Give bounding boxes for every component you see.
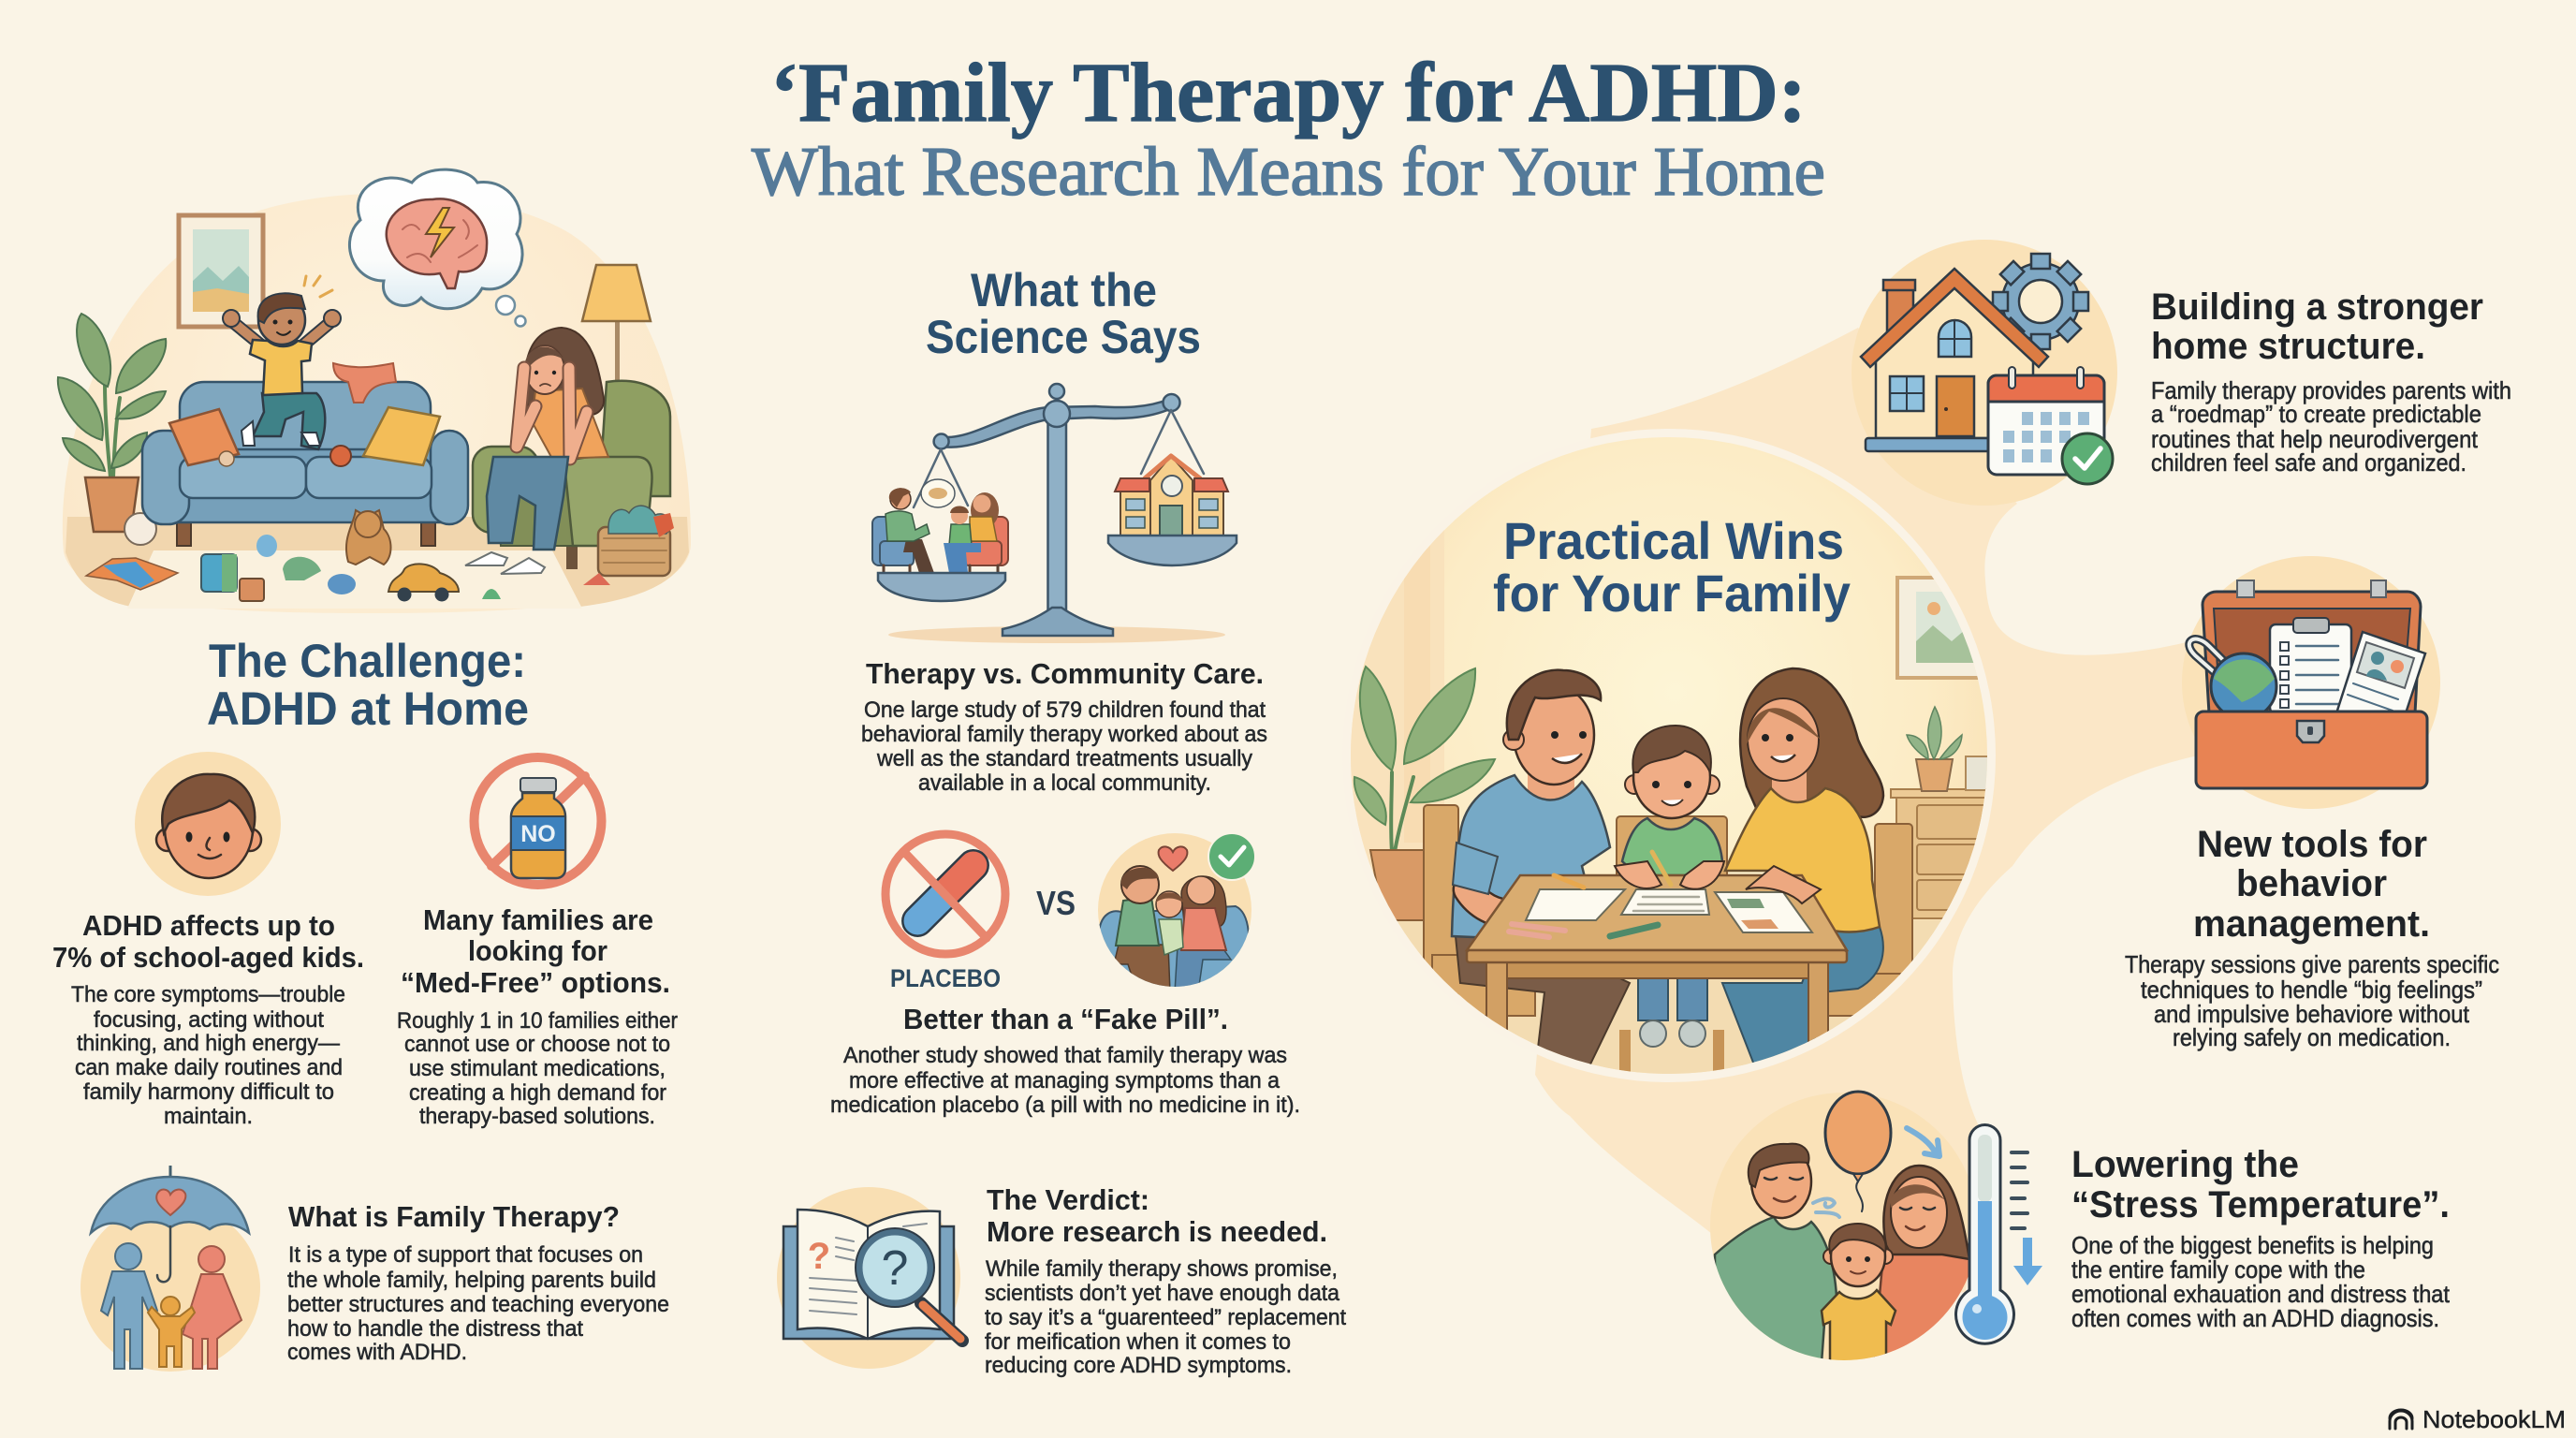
text: Med-Free options: “Med-Free” options. (401, 966, 670, 999)
text: Therapy vs Community Care: well as the standard treatments usually (876, 746, 1253, 771)
text: Therapy vs Community Care: behavioral family therapy worked about as (861, 722, 1267, 747)
text: New tools for behavior management: and impulsive behaviore without (2154, 1000, 2470, 1028)
text: The Verdict (985, 1183, 1346, 1378)
text: What is Family Therapy: What is Family Therapy? (288, 1200, 620, 1233)
icon: balance scale (872, 384, 1237, 643)
icon: child face (135, 752, 281, 896)
text: Building a stronger home structure: Building a stronger (2151, 286, 2483, 328)
text: ADHD affects (52, 909, 364, 1129)
text: Med-Free options (397, 903, 678, 1129)
text: Lowering the Stress Temperature (2071, 1144, 2451, 1332)
title: What Research Means for Your Home (752, 134, 1825, 211)
title (752, 47, 1825, 211)
label: VS: VS (1036, 884, 1076, 922)
heading: What the Science Says (926, 264, 1201, 363)
mother (1722, 668, 1883, 1067)
text: The Verdict: for meification when it comes to (985, 1329, 1291, 1355)
icon: open book and magnifier: ? (882, 1241, 908, 1296)
text: New tools for behavior management: Therapy sessions give parents specific (2125, 950, 2499, 978)
text: What is Family Therapy: the whole family, helping parents build (287, 1268, 656, 1293)
icon: crossed-out placebo pill: PLACEBO (890, 964, 1001, 992)
text: Lowering the Stress Temperature: “Stress Temperature”. (2071, 1184, 2450, 1225)
text: The Verdict: While family therapy shows promise, (986, 1256, 1338, 1282)
text: Lowering the Stress Temperature: emotional exhauation and distress that (2071, 1280, 2451, 1308)
text: Building a stronger home structure: routines that help neurodivergent (2151, 425, 2479, 453)
text: The Verdict: The Verdict: (987, 1183, 1149, 1216)
papers and pencils (1509, 852, 1821, 937)
text: ADHD affects: The core symptoms—trouble (71, 982, 345, 1007)
text: New tools for behavior management: behavior (2236, 863, 2387, 904)
panel: practical wins circle (1342, 429, 1996, 1082)
text: The Verdict: reducing core ADHD symptoms. (985, 1353, 1292, 1378)
heading: Practical Wins (1493, 511, 1851, 623)
text: ADHD affects: maintain. (164, 1104, 253, 1129)
text: Med-Free options: use stimulant medications, (409, 1056, 666, 1081)
text: What is Family Therapy (287, 1200, 669, 1365)
heading: The Challenge (207, 635, 529, 735)
jumping boy (223, 276, 341, 449)
text: New tools for behavior management: techniques to hendle “big feelings” (2141, 976, 2482, 1004)
text: Lowering the Stress Temperature: often comes with an ADHD diagnosis. (2071, 1304, 2439, 1332)
text: ADHD affects: family harmony difficult to (83, 1079, 334, 1105)
text: ADHD affects: focusing, acting without (94, 1007, 324, 1033)
text: ADHD affects: 7% of school-aged kids. (52, 941, 364, 974)
title: ‘Family Therapy for ADHD: (770, 47, 1807, 139)
heading: What the Science Says: Science Says (926, 311, 1201, 363)
icon: family under umbrella (80, 1166, 260, 1372)
icon: open book and magnifier: ? (808, 1236, 830, 1277)
text: Med-Free options: therapy-based solutions. (419, 1104, 655, 1129)
text: Med-Free options: looking for (468, 934, 607, 967)
text: Med-Free options: cannot use or choose not to (404, 1032, 670, 1057)
icon: no medication: NO (520, 821, 556, 847)
heading: Practical Wins: for Your Family (1493, 564, 1851, 623)
text: Building a stronger home structure: a “roedmap” to create predictable (2151, 400, 2481, 428)
text: New tools for behavior management (2125, 824, 2499, 1051)
text: New tools for behavior management: management. (2193, 903, 2430, 945)
icon: crossed-out placebo pill (886, 834, 1005, 992)
icon: open book and magnifier (777, 1187, 962, 1369)
heading: Practical Wins: Practical Wins (1503, 511, 1844, 570)
heading: The Challenge: The Challenge: (209, 635, 526, 687)
text: Lowering the Stress Temperature: One of the biggest benefits is helping (2071, 1231, 2434, 1259)
potted plant (58, 314, 166, 545)
text: ADHD affects: thinking, and high energy— (77, 1031, 340, 1056)
thermometer (1956, 1125, 2042, 1343)
text: Better than a Fake Pill (830, 1003, 1300, 1118)
text: The Verdict: More research is needed. (987, 1215, 1327, 1248)
clipboard (2270, 618, 2351, 713)
child (1622, 726, 1722, 1047)
text: ADHD affects: can make daily routines and (75, 1055, 343, 1080)
text: Building a stronger home structure: children feel safe and organized. (2151, 448, 2466, 477)
text: What is Family Therapy: how to handle the distress that (287, 1316, 583, 1342)
wall picture (179, 215, 263, 327)
icon: calm family with balloon and thermometer (1710, 1092, 2042, 1376)
icon: happy family on sofa (1095, 833, 1255, 992)
text: ADHD affects: ADHD affects up to (82, 909, 335, 942)
flowing peach connector (1535, 328, 2247, 1311)
text: The Verdict: to say it’s a “guarenteed” replacement (985, 1305, 1346, 1330)
icon: house, gear and calendar (1852, 240, 2117, 506)
text: Med-Free options: Many families are (423, 903, 653, 936)
calendar (1988, 367, 2113, 484)
icon: toolbox (2182, 556, 2440, 809)
chairs (1424, 805, 1912, 1020)
floor lamp (582, 265, 651, 387)
text: Lowering the Stress Temperature: Lowering the (2071, 1144, 2299, 1185)
wall picture (1897, 578, 1982, 678)
stressed mother in armchair (465, 328, 674, 576)
heading: What the Science Says: What the (971, 264, 1157, 316)
text: Therapy vs Community Care: available in a local community. (918, 770, 1211, 796)
text: Lowering the Stress Temperature: the entire family cope with the (2071, 1255, 2365, 1284)
logo: NotebookLM: NotebookLM (2422, 1405, 2566, 1433)
left pan: therapy session (872, 479, 1008, 601)
text: Med-Free options: creating a high demand for (409, 1080, 666, 1106)
text: Therapy vs Community Care (861, 657, 1267, 796)
text: Building a stronger home structure (2151, 286, 2511, 477)
text: Better than a Fake Pill: Better than a “Fake Pill”. (903, 1003, 1228, 1035)
table (1467, 875, 1847, 1078)
balloon (1813, 1092, 1939, 1217)
large plant (1354, 667, 1495, 920)
text: Building a stronger home structure: Family therapy provides parents with (2151, 376, 2511, 404)
text: Therapy vs Community Care: Therapy vs. Community Care. (866, 657, 1264, 690)
text: Better than a Fake Pill: Another study showed that family therapy was (843, 1043, 1287, 1068)
text: What is Family Therapy: better structures and teaching everyone (287, 1292, 669, 1317)
father (1452, 670, 1630, 1072)
card (2336, 632, 2425, 713)
dresser with small plant (1891, 707, 1994, 918)
text: Therapy vs Community Care: One large study of 579 children found that (864, 697, 1266, 723)
text: Better than a Fake Pill: more effective at managing symptoms than a (849, 1068, 1280, 1093)
blue sofa (142, 363, 468, 546)
text: Building a stronger home structure: home structure. (2151, 326, 2425, 367)
icon: no medication (474, 757, 601, 885)
gear (1993, 254, 2088, 349)
text: New tools for behavior management: relying safely on medication. (2173, 1023, 2451, 1051)
illustration: chaotic living room (58, 169, 691, 613)
text: New tools for behavior management: New tools for (2197, 824, 2427, 865)
text: What is Family Therapy: comes with ADHD. (287, 1340, 467, 1365)
text: What is Family Therapy: It is a type of support that focuses on (288, 1242, 643, 1268)
text: The Verdict: scientists don’t yet have enough data (985, 1281, 1339, 1306)
heading: The Challenge: ADHD at Home (207, 682, 529, 735)
scattered toys (86, 510, 610, 601)
text: Med-Free options: Roughly 1 in 10 families either (397, 1008, 678, 1034)
text: Better than a Fake Pill: medication placebo (a pill with no medicine in it). (830, 1093, 1300, 1118)
thought bubble with brain (349, 169, 526, 326)
right pan: community clinic (1108, 456, 1237, 565)
